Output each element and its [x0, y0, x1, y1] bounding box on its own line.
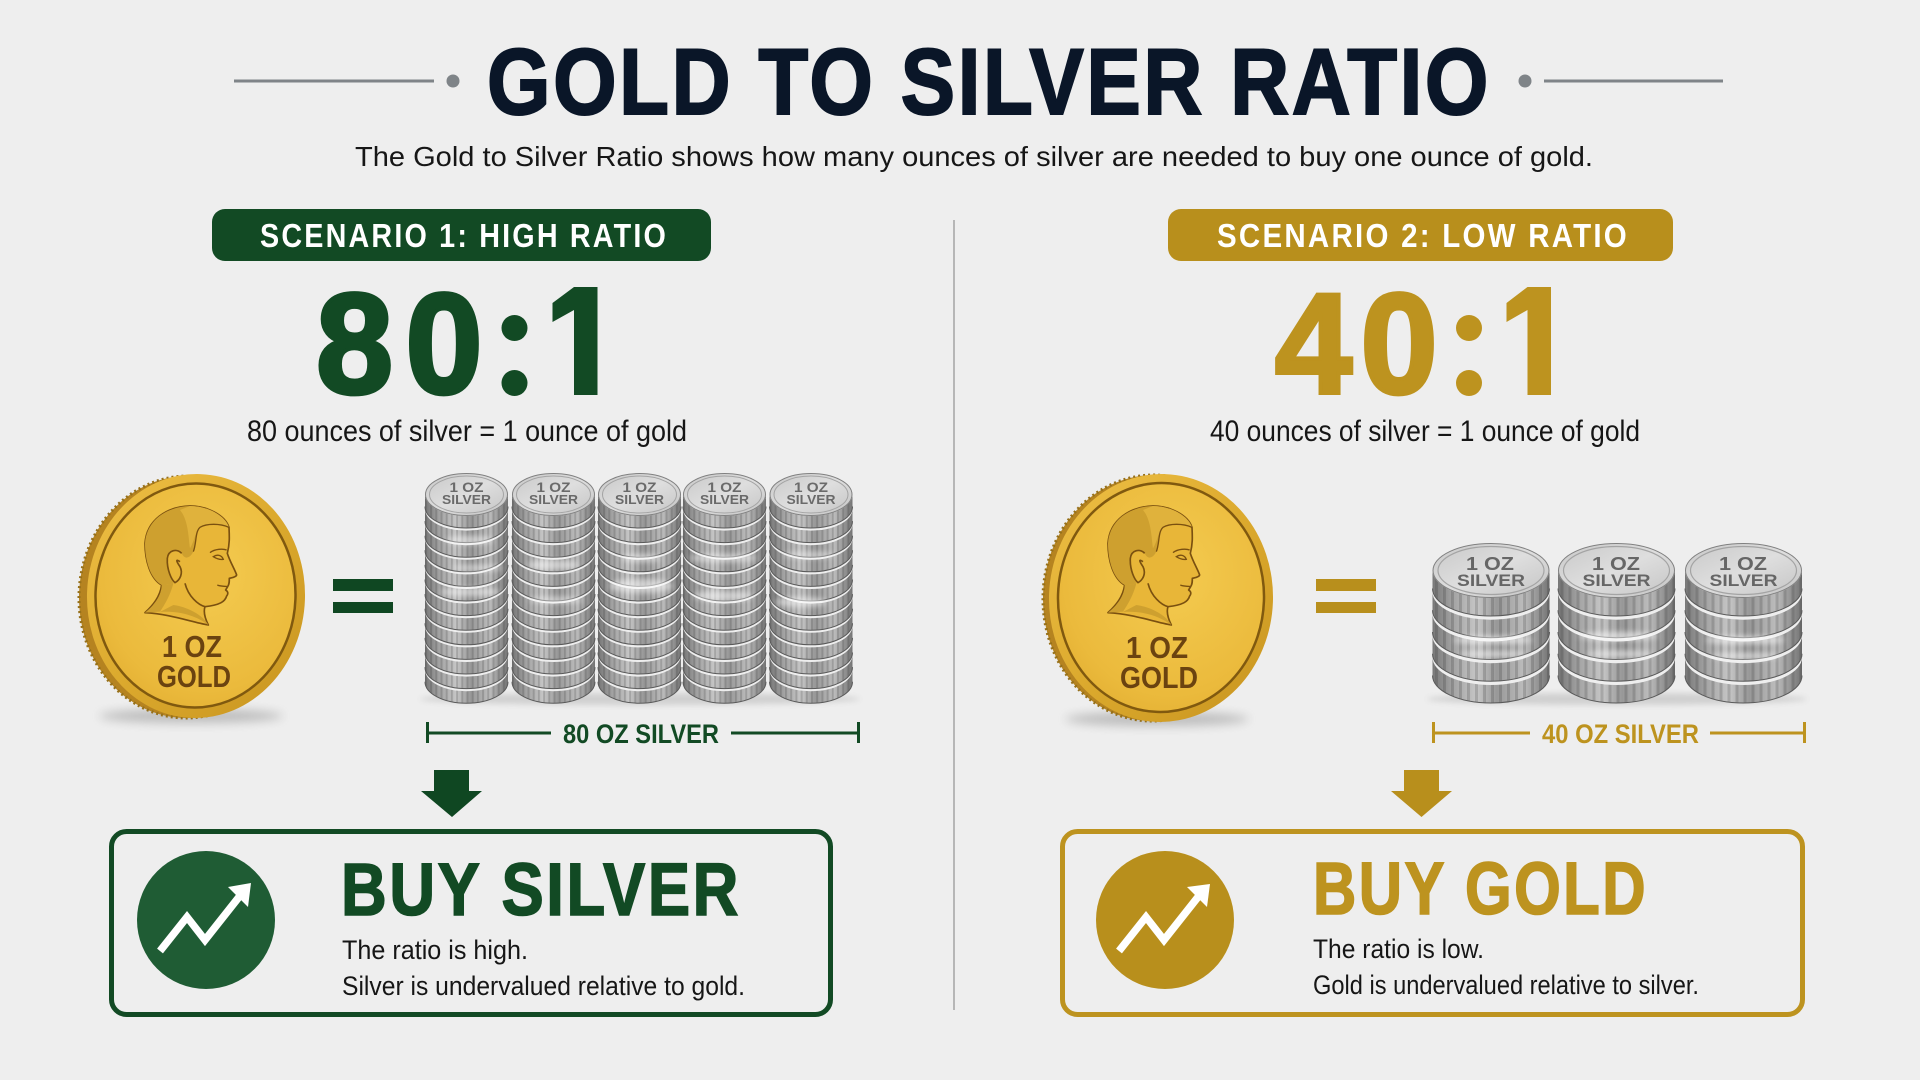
verdict explanation: [1313, 934, 1699, 1000]
callout: buy gold: [1062, 832, 1802, 1014]
icon: gold coin: 1 OZ: [1126, 630, 1188, 665]
silver coin stacks: 40 oz: [1427, 543, 1807, 705]
icon: gold coin: GOLD: [157, 659, 231, 694]
icon: gold coin: GOLD: [1120, 660, 1198, 695]
silver coin stacks: 40 oz: SILVER: [1582, 571, 1650, 590]
icon: gold coin: 1 OZ: [162, 629, 222, 664]
scenario 1 pill: [212, 209, 711, 261]
verdict heading: BUY SILVER: [341, 848, 741, 931]
title rule left: [234, 74, 460, 88]
scenario 2 pill: [1168, 209, 1673, 261]
ratio caption: 80 ounces of silver = 1 ounce of gold: [247, 415, 687, 448]
center divider: [953, 220, 955, 1010]
silver coin stacks: 80 oz: 1 OZ: [622, 479, 657, 495]
silver coin stacks: 80 oz: 1 OZ: [450, 479, 484, 495]
ratio 40:1: 40:1: [1275, 263, 1570, 423]
ratio 80:1: [318, 287, 598, 396]
verdict explanation: Silver is undervalued relative to gold.: [342, 971, 745, 1001]
silver coin stacks: 80 oz: SILVER: [786, 492, 836, 507]
icon: gold coin: [75, 470, 309, 723]
silver coin stacks: 40 oz: SILVER: [1710, 571, 1778, 590]
equals sign: [1316, 579, 1376, 613]
verdict explanation: Gold is undervalued relative to silver.: [1313, 970, 1699, 1000]
verdict heading: BUY GOLD: [1313, 847, 1648, 930]
title block: [234, 29, 1723, 172]
panel: scenario 1 high ratio: [75, 209, 860, 1014]
bracket label: 40 oz silver: [1432, 719, 1804, 749]
silver coin stacks: 80 oz: SILVER: [700, 492, 750, 507]
silver coin stacks: 80 oz: 1 OZ: [794, 479, 828, 495]
silver coin stacks: 80 oz: 1 OZ: [708, 479, 742, 495]
silver coin stacks: 40 oz: 1 OZ: [1592, 554, 1640, 574]
silver coin stacks: 80 oz: SILVER: [615, 492, 665, 507]
verdict explanation: [342, 935, 745, 1001]
icon: gold coin: [1039, 470, 1277, 726]
silver coin stacks: 40 oz: SILVER: [1457, 571, 1525, 590]
ratio caption: 40 ounces of silver = 1 ounce of gold: [1210, 415, 1640, 448]
callout: buy silver: [112, 832, 830, 1014]
verdict explanation: The ratio is high.: [342, 935, 528, 965]
arrow down: [421, 770, 482, 817]
panel: scenario 2 low ratio: [1039, 209, 1807, 1014]
icon: rising chart: [137, 851, 275, 989]
silver coin stacks: 40 oz: 1 OZ: [1719, 554, 1767, 574]
bracket label: 80 oz silver: 80 OZ SILVER: [563, 719, 719, 749]
silver coin stacks: 80 oz: [420, 473, 860, 705]
silver coin stacks: 80 oz: 1 OZ: [536, 479, 571, 495]
subtitle: The Gold to Silver Ratio shows how many ounces of silver are needed to buy one ounce of gold.: [355, 141, 1593, 172]
ratio 80:1: 80:1: [316, 263, 616, 423]
scenario 1 pill: SCENARIO 1: HIGH RATIO: [260, 217, 668, 254]
bracket label: 40 oz silver: 40 OZ SILVER: [1542, 719, 1699, 749]
main title: GOLD TO SILVER RATIO: [487, 29, 1491, 134]
silver coin stacks: 80 oz: SILVER: [442, 492, 492, 507]
bracket label: 80 oz silver: [426, 719, 858, 749]
equals sign: [333, 579, 393, 613]
scenario 2 pill: SCENARIO 2: LOW RATIO: [1217, 217, 1629, 254]
arrow down: [1391, 770, 1452, 817]
icon: rising chart: [1096, 851, 1234, 989]
verdict explanation: The ratio is low.: [1313, 934, 1484, 964]
silver coin stacks: 80 oz: SILVER: [529, 492, 579, 507]
silver coin stacks: 40 oz: 1 OZ: [1466, 554, 1514, 574]
title rule right: [1518, 74, 1723, 88]
ratio 40:1: [1275, 287, 1551, 396]
